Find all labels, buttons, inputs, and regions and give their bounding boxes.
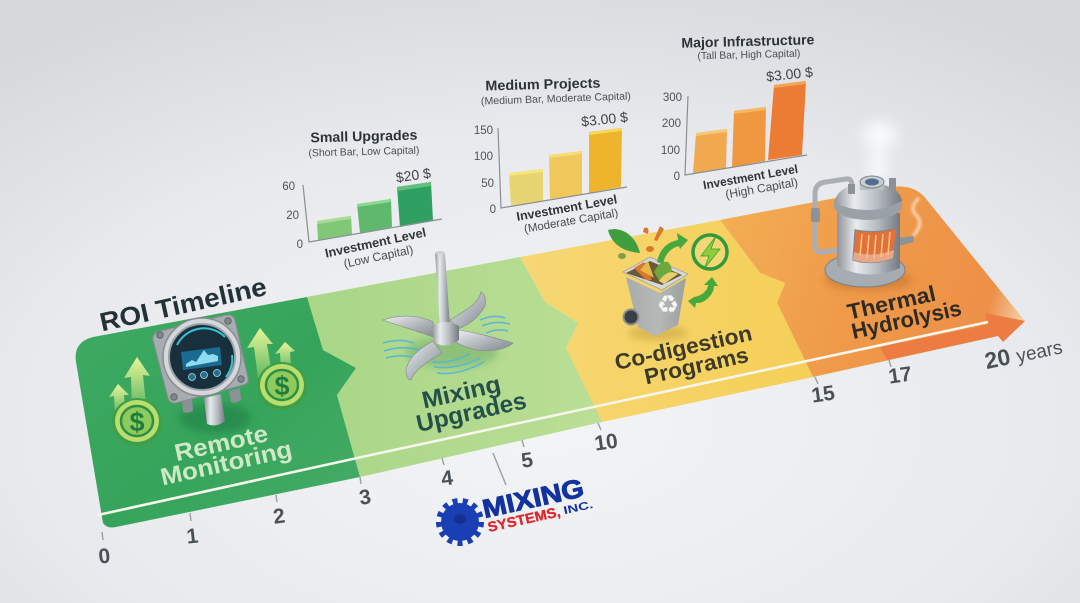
subheading: major infrastructure: (Tall Bar, High Capital): [697, 48, 801, 62]
label: Thermal Hydrolysis: Thermal: [845, 281, 938, 325]
panel: small upgrades chart: [282, 127, 442, 274]
axis caption: high capital: [702, 162, 801, 205]
axes: major infrastructure: [685, 96, 807, 175]
timeline year labels: 3: [358, 485, 372, 510]
axis values: medium projects: 100: [474, 151, 493, 163]
timeline year labels: 10: [593, 430, 619, 456]
timeline year labels: 2: [272, 504, 286, 529]
logo wordmark: SYSTEMS,: [486, 503, 562, 535]
band segment: orange, thermal hydrolysis: [720, 187, 1025, 377]
axis caption: low capital: Investment Level: [324, 225, 427, 260]
timeline ticks: [102, 360, 891, 540]
heading: medium projects: Medium Projects: [485, 74, 601, 94]
axis caption: moderate capital: Investment Level: [515, 192, 618, 224]
icon: energy lightning and arrows: [657, 233, 727, 308]
timeline year labels: 5: [520, 448, 535, 473]
label: Mixing Upgrades: Mixing: [419, 371, 503, 415]
label: Remote Monitoring: [158, 420, 295, 491]
axes: small upgrades: [303, 185, 442, 242]
bar value: $3.00 $ medium: $3.00 $: [580, 109, 629, 129]
axis caption: high capital: Investment Level: [702, 162, 799, 192]
axis values: medium projects: 50: [481, 178, 494, 190]
subheading: medium projects: (Medium Bar, Moderate Capital): [481, 90, 631, 108]
bars: small upgrades: [317, 182, 433, 240]
panel: medium projects chart: [474, 74, 631, 237]
logo wordmark: [480, 472, 594, 535]
icon: remote monitoring gauge: [153, 315, 251, 433]
icon: blue gear: [439, 501, 481, 543]
bars: medium projects: [509, 128, 622, 206]
icon: thermal hydrolysis reactor: [811, 176, 914, 290]
label: Remote Monitoring: Remote: [172, 420, 271, 467]
icon: food waste bin: [608, 226, 688, 340]
timeline axis line: [98, 322, 988, 515]
label: Co-digestion Programs: Co-digestion: [612, 320, 754, 375]
axis caption: moderate capital: [515, 192, 620, 237]
icon: money arrows and coin, right: [247, 328, 307, 410]
logo wordmark: INC.: [562, 499, 594, 517]
heading: major infrastructure: Major Infrastructure: [681, 31, 815, 51]
timeline year labels: 1: [185, 524, 200, 549]
icon: food waste bin: ♻: [657, 291, 679, 319]
band segment: yellow, co-digestion: [520, 220, 813, 422]
band segment: green, remote monitoring: [76, 297, 360, 528]
axes: medium projects: [498, 128, 627, 208]
axis caption: low capital: (Low Capital): [342, 242, 414, 271]
bar value: $20 $: $20 $: [395, 165, 432, 185]
axis values: small upgrades: 20: [286, 210, 299, 222]
axis values: major infrastructure: [661, 92, 682, 183]
bar value: $3.00 $ major: $3.00 $: [765, 64, 814, 84]
arrow: timeline head: [880, 313, 1025, 360]
label: Mixing Upgrades: Upgrades: [414, 387, 529, 438]
timeline year labels: 20 years: [982, 332, 1064, 374]
icon: money arrows and coin, left: $: [129, 407, 145, 437]
subheading: small upgrades: (Short Bar, Low Capital): [308, 145, 420, 159]
axis values: major infrastructure: 300: [663, 92, 682, 104]
axis caption: moderate capital: (Moderate Capital): [523, 207, 619, 236]
axis values: medium projects: 0: [490, 204, 496, 216]
timeline year labels: 15: [810, 382, 837, 408]
axis values: medium projects: 150: [474, 125, 493, 137]
axis values: major infrastructure: 0: [674, 171, 680, 183]
axis values: small upgrades: 60: [282, 181, 295, 193]
label: Co-digestion Programs: Programs: [642, 342, 751, 389]
axis values: small upgrades: [282, 181, 303, 251]
axis caption: low capital: [324, 225, 430, 274]
axis values: medium projects: [474, 125, 496, 216]
heading: small upgrades: Small Upgrades: [310, 127, 418, 145]
axis values: small upgrades: 0: [297, 239, 303, 251]
timeline year labels: 4: [440, 466, 455, 491]
timeline year labels: 17: [887, 363, 913, 389]
axis values: major infrastructure: 100: [661, 145, 680, 157]
label: Thermal Hydrolysis: Hydrolysis: [849, 295, 964, 344]
axis caption: high capital: (High Capital): [724, 175, 799, 202]
bars: major infrastructure: [693, 81, 806, 173]
icon: steam: [863, 122, 920, 236]
timeline year labels: [97, 332, 1064, 569]
icon: mixing impeller: [383, 251, 513, 380]
label: Remote Monitoring: Monitoring: [158, 436, 295, 491]
axis values: major infrastructure: 200: [662, 118, 681, 130]
logo wordmark: MIXING: [480, 472, 587, 524]
timeline year labels: 0: [97, 544, 111, 569]
icon: money arrows and coin, right: $: [274, 371, 290, 401]
logo: Mixing Systems, Inc.: [439, 472, 594, 543]
panel: major infrastructure chart: [661, 31, 815, 205]
icon: money arrows and coin, left: [109, 357, 162, 446]
title: ROI Timeline: [97, 271, 269, 337]
band segment: light green, mixing upgrades: [307, 257, 602, 477]
panel: timeline band: [76, 187, 1025, 528]
